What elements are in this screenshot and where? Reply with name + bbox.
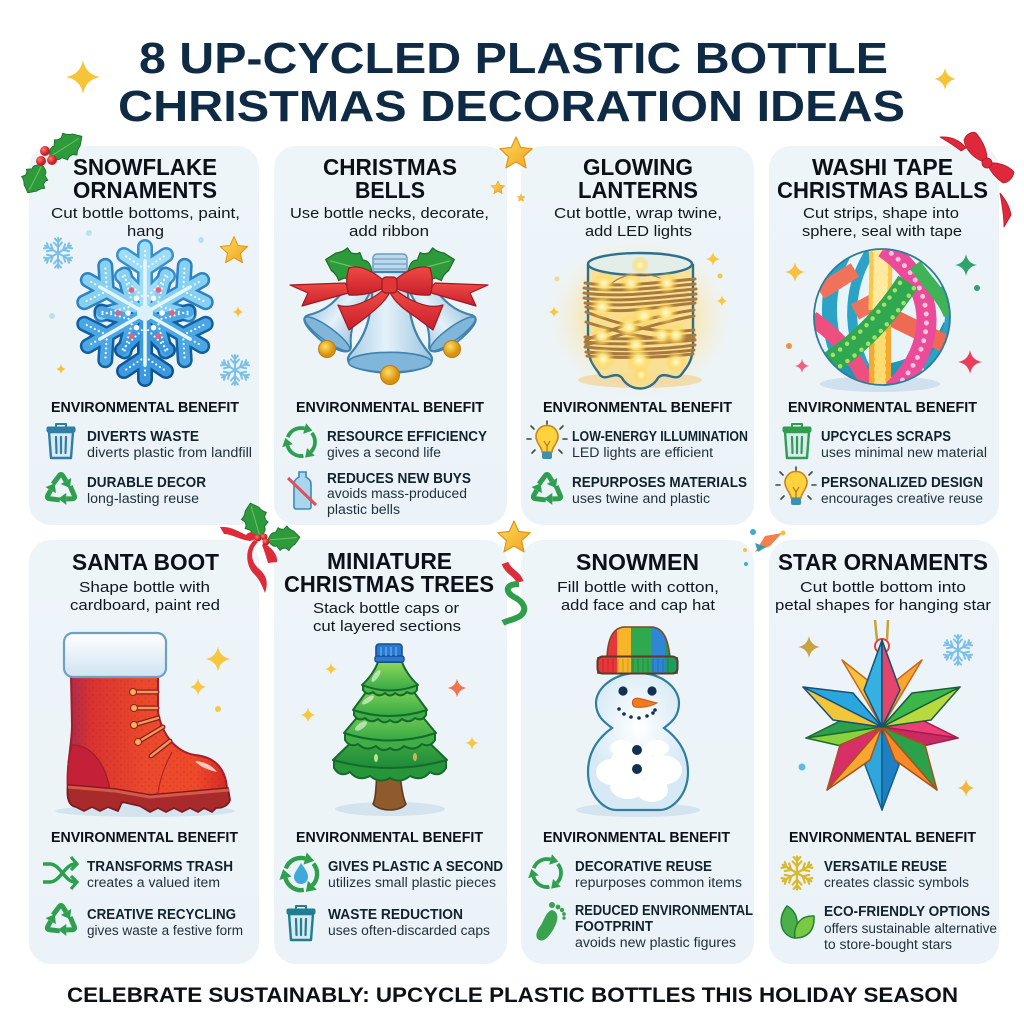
panel: washi tape christmas balls <box>769 146 999 525</box>
panel: snowmen <box>521 540 754 964</box>
heading <box>777 154 988 203</box>
illustration: santa boot <box>55 633 235 817</box>
panel: christmas bells <box>274 146 507 525</box>
title: CHRISTMAS DECORATION IDEAS <box>118 82 905 131</box>
benefit heading: ENVIRONMENTAL BENEFIT <box>296 400 484 416</box>
illustration: star ornament <box>798 620 974 810</box>
instructions: Cut bottle bottom into <box>800 579 966 596</box>
heading: STAR ORNAMENTS <box>778 549 988 575</box>
benefit: personalized design: encourages creative reuse <box>821 491 983 506</box>
instructions: hang <box>127 223 164 240</box>
illustration: washi tape ball <box>785 248 982 392</box>
instructions <box>775 579 991 614</box>
benefit: creative recycling: CREATIVE RECYCLING <box>87 907 236 923</box>
card background <box>769 540 999 964</box>
heading: SNOWMEN <box>576 549 699 575</box>
decoration: ribbon bow top right <box>940 132 1014 227</box>
benefit: gives plastic a second: GIVES PLASTIC A SECOND <box>328 859 503 875</box>
heading: GLOWING <box>583 154 693 180</box>
heading <box>578 154 698 203</box>
instructions: Fill bottle with cotton, <box>557 579 719 596</box>
illustration: snowflake <box>43 230 250 385</box>
heading <box>323 154 457 203</box>
instructions <box>313 600 461 635</box>
instructions <box>802 205 962 240</box>
card background <box>274 540 507 964</box>
heading: ORNAMENTS <box>73 177 217 203</box>
illustration: bottle christmas tree <box>300 644 478 816</box>
card background <box>521 540 754 964</box>
heading: SNOWFLAKE <box>73 154 217 180</box>
benefit: gives plastic a second: utilizes small plastic pieces <box>328 875 496 890</box>
benefit: eco-friendly options: to store-bought stars <box>824 937 952 952</box>
benefit heading: ENVIRONMENTAL BENEFIT <box>543 830 730 846</box>
benefit: eco-friendly options: ECO-FRIENDLY OPTIONS <box>824 904 990 920</box>
heading <box>73 154 217 203</box>
benefit heading: ENVIRONMENTAL BENEFIT <box>543 400 732 416</box>
title sparkles <box>66 60 956 94</box>
instructions: petal shapes for hanging star <box>775 597 991 614</box>
card background <box>29 540 259 964</box>
benefit: waste reduction: WASTE REDUCTION <box>328 907 463 923</box>
benefit: gives plastic a second <box>276 852 503 898</box>
title: 8 UP-CYCLED PLASTIC BOTTLE <box>139 34 888 83</box>
benefit: reduces new buys <box>288 471 471 517</box>
benefit: reduces new buys: plastic bells <box>327 502 400 517</box>
instructions: Cut strips, shape into <box>803 205 959 222</box>
benefit: low-energy illumination <box>527 421 748 460</box>
benefit: transforms trash: creates a valued item <box>87 875 220 890</box>
instructions: Cut bottle, wrap twine, <box>554 205 722 222</box>
illustration: plastic bottle bells <box>290 243 488 384</box>
heading <box>284 548 494 597</box>
instructions <box>290 205 489 240</box>
heading: WASHI TAPE <box>812 154 953 180</box>
heading: CHRISTMAS BALLS <box>777 177 988 203</box>
card background <box>274 146 507 525</box>
heading: BELLS <box>355 177 425 203</box>
card background <box>29 146 259 525</box>
instructions: add face and cap hat <box>561 597 716 614</box>
benefit heading: ENVIRONMENTAL BENEFIT <box>51 400 239 416</box>
benefit heading: ENVIRONMENTAL BENEFIT <box>296 830 483 846</box>
benefit: reduces new buys: avoids mass-produced <box>327 486 467 501</box>
benefit: upcycles scraps: UPCYCLES SCRAPS <box>821 429 951 445</box>
benefit: low-energy illumination: LED lights are efficient <box>572 445 713 460</box>
decoration: confetti <box>743 529 786 566</box>
card background <box>769 146 999 525</box>
illustration: lantern <box>548 238 732 398</box>
benefit heading: ENVIRONMENTAL BENEFIT <box>789 830 976 846</box>
title <box>118 34 905 131</box>
benefit: decorative reuse: repurposes common items <box>575 875 742 890</box>
benefit: waste reduction <box>287 906 490 940</box>
benefit: reduced environmental footprint: REDUCED ENVIRONMENTAL <box>575 903 753 919</box>
instructions: sphere, seal with tape <box>802 223 962 240</box>
heading: CHRISTMAS TREES <box>284 571 494 597</box>
instructions <box>70 579 220 614</box>
benefit: creative recycling <box>42 906 243 938</box>
benefit: transforms trash <box>43 857 233 890</box>
benefit heading: ENVIRONMENTAL BENEFIT <box>788 400 977 416</box>
benefit: repurposes materials: uses twine and plastic <box>572 491 710 506</box>
benefit: creative recycling: gives waste a festive form <box>87 923 243 938</box>
decoration: holly top left <box>16 125 89 199</box>
instructions: Use bottle necks, decorate, <box>290 205 489 222</box>
card background <box>521 146 754 525</box>
benefit: durable decor: long-lasting reuse <box>87 491 199 506</box>
footer banner: CELEBRATE SUSTAINABLY: UPCYCLE PLASTIC BOTTLES THIS HOLIDAY SEASON <box>67 984 958 1007</box>
instructions: Cut bottle bottoms, paint, <box>51 205 240 222</box>
benefit: durable decor <box>42 474 206 507</box>
benefit: resource efficiency: gives a second life <box>327 445 441 460</box>
benefit: reduced environmental footprint <box>536 902 753 950</box>
instructions: cut layered sections <box>313 618 461 635</box>
benefit: diverts waste: diverts plastic from landfill <box>87 445 252 460</box>
benefit: reduced environmental footprint: FOOTPRINT <box>575 919 653 935</box>
benefit: durable decor: DURABLE DECOR <box>87 475 206 491</box>
instructions: add ribbon <box>349 223 429 240</box>
benefit heading: ENVIRONMENTAL BENEFIT <box>51 830 238 846</box>
benefit: repurposes materials: REPURPOSES MATERIALS <box>572 475 747 491</box>
decoration: curled ribbon centre <box>503 563 524 623</box>
benefit: versatile reuse: VERSATILE REUSE <box>824 859 947 875</box>
heading: MINIATURE <box>327 548 452 574</box>
illustration: snowman <box>576 625 700 817</box>
benefit: versatile reuse <box>781 856 969 890</box>
panel: star ornaments <box>769 540 999 964</box>
benefit: upcycles scraps: uses minimal new material <box>821 445 987 460</box>
benefit: reduces new buys: REDUCES NEW BUYS <box>327 471 471 487</box>
benefit: low-energy illumination: LOW-ENERGY ILLUMINATION <box>572 429 748 445</box>
instructions: Shape bottle with <box>79 579 210 596</box>
benefit: personalized design <box>776 467 983 506</box>
benefit: diverts waste <box>47 424 252 460</box>
panel: miniature christmas trees <box>274 540 507 964</box>
benefit: repurposes materials <box>528 474 747 507</box>
panel: snowflake ornaments <box>29 146 259 525</box>
heading: SANTA BOOT <box>72 549 219 575</box>
benefit: decorative reuse <box>525 854 742 894</box>
heading: LANTERNS <box>578 177 698 203</box>
benefit: personalized design: PERSONALIZED DESIGN <box>821 475 983 491</box>
decoration: gold stars top centre <box>491 137 532 201</box>
benefit: diverts waste: DIVERTS WASTE <box>87 429 199 445</box>
heading: CHRISTMAS <box>323 154 457 180</box>
instructions <box>51 205 240 240</box>
decoration: holly and ribbon centre left <box>220 500 301 593</box>
benefit: decorative reuse: DECORATIVE REUSE <box>575 859 712 875</box>
instructions <box>557 579 719 614</box>
panel: santa boot <box>29 540 259 964</box>
instructions: cardboard, paint red <box>70 597 220 614</box>
benefit: transforms trash: TRANSFORMS TRASH <box>87 859 233 875</box>
benefit: eco-friendly options <box>781 904 997 952</box>
instructions: add LED lights <box>585 223 692 240</box>
instructions <box>554 205 722 240</box>
benefit: reduced environmental footprint: avoids new plastic figures <box>575 935 736 950</box>
benefit: resource efficiency <box>279 423 487 463</box>
benefit: resource efficiency: RESOURCE EFFICIENCY <box>327 429 487 445</box>
instructions: Stack bottle caps or <box>313 600 459 617</box>
decoration: gold star centre <box>498 521 530 552</box>
benefit: eco-friendly options: offers sustainable alternative <box>824 921 997 936</box>
benefit: upcycles scraps <box>783 424 987 460</box>
panel: glowing lanterns <box>521 146 754 525</box>
benefit: waste reduction: uses often-discarded caps <box>328 923 490 938</box>
benefit: versatile reuse: creates classic symbols <box>824 875 969 890</box>
